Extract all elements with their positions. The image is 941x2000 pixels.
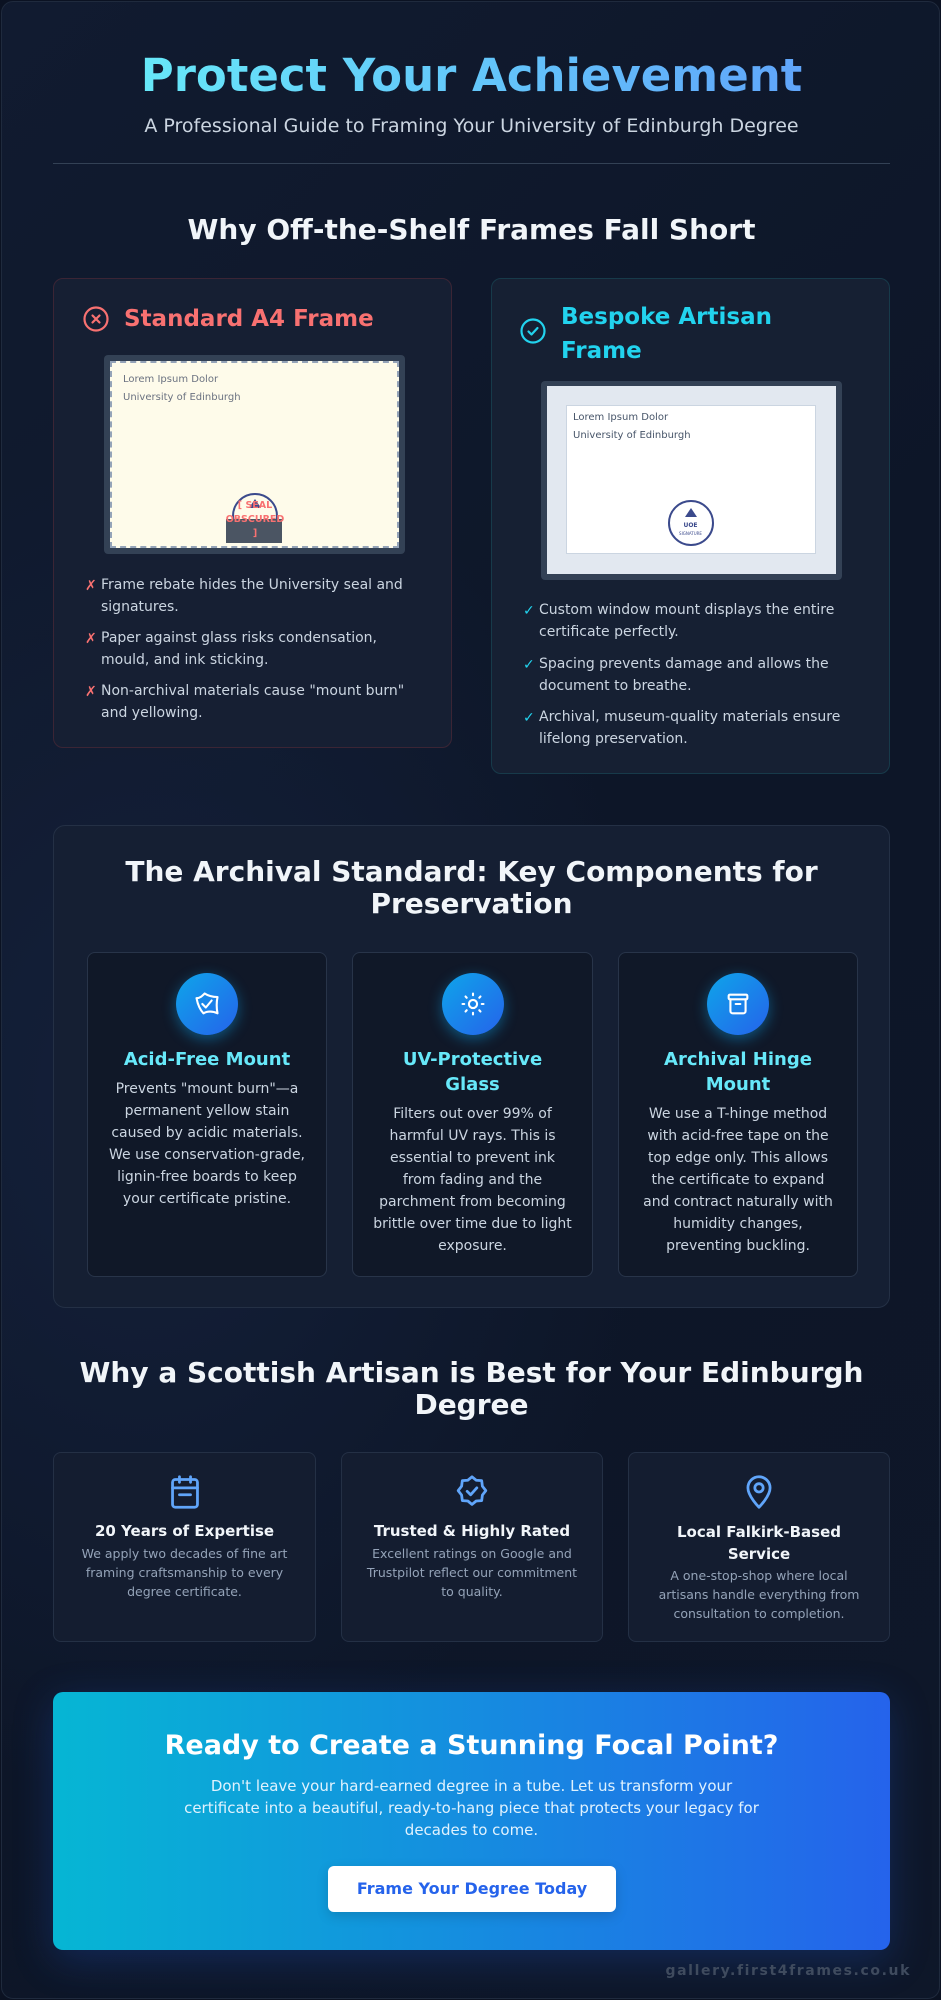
card: trusted: Trusted & Highly Rated (374, 1522, 570, 1540)
illustration: A4 frame: ] (253, 528, 257, 539)
card: trusted: Trustpilot reflect our commitment (367, 1565, 577, 1580)
title: Protect Your Achievement (141, 49, 802, 102)
panel: archival standard (53, 825, 890, 1308)
CTA button (328, 1866, 616, 1912)
CTA title: Ready to Create a Stunning Focal Point? (165, 1730, 778, 1761)
card: UV glass: brittle over time due to light (373, 1216, 572, 1232)
subtitle: A Professional Guide to Framing Your University of Edinburgh Degree (144, 115, 799, 137)
card title (561, 304, 772, 364)
seal visible (668, 500, 714, 546)
heading (125, 855, 818, 920)
card: UV glass: parchment from becoming (379, 1194, 566, 1210)
heading: scottish artisan: Degree (414, 1388, 529, 1421)
illustration: A4 frame: Lorem Ipsum Dolor (123, 374, 218, 385)
card: archival hinge (618, 952, 858, 1277)
card: archival hinge: Mount (706, 1074, 770, 1095)
bullet list: problems: Paper against glass risks condensation, (101, 630, 377, 646)
panel: bespoke artisan frame (491, 278, 890, 774)
bullet list: benefits: ✓ (523, 657, 535, 673)
bullet list: benefits: certificate perfectly. (539, 624, 679, 640)
icon: badge check (456, 1475, 488, 1506)
illustration: bespoke frame: University of Edinburgh (573, 430, 691, 441)
bullet list: problems (85, 577, 404, 721)
card: acid-free mount: caused by acidic materials. (111, 1125, 303, 1141)
icon: calendar (171, 1475, 199, 1509)
card: UV glass: UV-Protective (403, 1049, 542, 1070)
card: UV glass: essential to prevent ink (390, 1150, 555, 1166)
bullet list: benefits: Archival, museum-quality materials ensure (539, 709, 840, 725)
card: trusted: Excellent ratings on Google and (372, 1546, 572, 1561)
card: 20 years: 20 Years of Expertise (95, 1522, 274, 1540)
bullet list: problems: mould, and ink sticking. (101, 652, 268, 668)
card title: Standard A4 Frame (124, 306, 374, 332)
illustration: A4 frame (104, 355, 405, 554)
icon: archive box (707, 973, 769, 1035)
card: UV glass: harmful UV rays. This is (389, 1128, 556, 1144)
illustration: A4 frame: University of Edinburgh (123, 392, 241, 403)
card: acid-free mount: lignin-free boards to keep (117, 1169, 297, 1185)
bullet list: problems: ✗ (85, 684, 97, 700)
illustration: bespoke frame (541, 381, 842, 580)
card: local falkirk (628, 1452, 890, 1642)
bullet list: problems: ✗ (85, 578, 97, 594)
CTA text (184, 1777, 759, 1839)
card: UV glass: Filters out over 99% of (393, 1106, 552, 1122)
bullet list: benefits: ✓ (523, 603, 535, 619)
bullet list: benefits: ✓ (523, 710, 535, 726)
seal visible: SIGNATURE (679, 531, 702, 536)
icon: x circle (83, 306, 109, 332)
card: archival hinge: humidity changes, (673, 1216, 803, 1232)
card: archival hinge: Archival Hinge (664, 1049, 812, 1070)
card: acid-free mount: We use conservation-grade, (109, 1147, 305, 1163)
bullet list: benefits: Spacing prevents damage and allows the (539, 656, 829, 672)
bullet list: benefits: Custom window mount displays the entire (539, 602, 834, 618)
card: 20 years: framing craftsmanship to every (86, 1565, 283, 1580)
bullet list: problems: Non-archival materials cause "mount burn" (101, 683, 404, 699)
illustration: A4 frame: [ SEAL (238, 500, 272, 511)
bullet list: problems: signatures. (101, 599, 179, 615)
card: trusted (341, 1452, 603, 1642)
card title: Bespoke Artisan (561, 304, 772, 330)
bullet list: benefits: document to breathe. (539, 678, 692, 694)
card: acid-free mount: permanent yellow stain (125, 1103, 289, 1119)
card: acid-free mount: your certificate pristine. (123, 1191, 291, 1207)
CTA text: decades to come. (405, 1821, 538, 1839)
seal obscured (232, 493, 278, 539)
CTA button: Frame Your Degree Today (357, 1879, 587, 1898)
bullet list: benefits: lifelong preservation. (539, 731, 688, 747)
panel: standard A4 frame (53, 278, 452, 748)
card: UV glass: exposure. (438, 1238, 507, 1254)
card: 20 years: We apply two decades of fine art (82, 1546, 287, 1561)
illustration: bespoke frame: Lorem Ipsum Dolor (573, 412, 668, 423)
heading: Preservation (370, 887, 573, 920)
card: acid-free mount: Prevents "mount burn"—a (116, 1081, 298, 1097)
card: archival hinge: preventing buckling. (666, 1238, 810, 1254)
bullet list: problems: and yellowing. (101, 705, 203, 721)
card: archival hinge: with acid-free tape on the (647, 1128, 829, 1144)
card: local falkirk: A one-stop-shop where local (670, 1568, 848, 1583)
heading: scottish artisan (80, 1356, 863, 1421)
card title: Frame (561, 338, 642, 364)
heading: scottish artisan: Why a Scottish Artisan is Best for Your Edinburgh (80, 1356, 863, 1389)
card: acid-free mount (87, 952, 327, 1277)
bullet list: benefits (523, 602, 840, 747)
bullet list: problems: Frame rebate hides the University seal and (101, 577, 403, 593)
CTA text: certificate into a beautiful, ready-to-hang piece that protects your legacy for (184, 1799, 759, 1817)
seal visible: UOE (683, 522, 698, 529)
card: UV glass: from fading and the (403, 1172, 542, 1188)
card: archival hinge: and contract naturally with (643, 1194, 833, 1210)
card: 20 years (53, 1452, 316, 1642)
footer url: gallery.first4frames.co.uk (666, 1963, 911, 1979)
icon: check circle (520, 318, 546, 344)
card: archival hinge: We use a T-hinge method (649, 1106, 827, 1122)
heading: The Archival Standard: Key Components for (125, 855, 818, 888)
card: archival hinge: top edge only. This allows (648, 1150, 828, 1166)
card: acid-free mount: Acid-Free Mount (124, 1049, 290, 1070)
icon: sun (442, 973, 504, 1035)
icon: map pin (746, 1475, 772, 1509)
card: local falkirk: Service (728, 1545, 790, 1563)
illustration: A4 frame: OBSCURED (226, 514, 284, 525)
bullet list: problems: ✗ (85, 631, 97, 647)
card: 20 years: degree certificate. (127, 1584, 242, 1599)
card: UV glass: Glass (445, 1074, 500, 1095)
icon: shield (176, 973, 238, 1035)
card: UV glass (352, 952, 593, 1277)
CTA banner (53, 1692, 890, 1950)
card: local falkirk: consultation to completion. (673, 1606, 845, 1621)
heading: off-the-shelf: Why Off-the-Shelf Frames Fall Short (188, 213, 755, 246)
card: trusted: to quality. (441, 1584, 503, 1599)
CTA text: Don't leave your hard-earned degree in a tube. Let us transform your (211, 1777, 732, 1795)
card: local falkirk: Local Falkirk-Based (677, 1523, 841, 1541)
card: archival hinge: the certificate to expand (652, 1172, 824, 1188)
card: local falkirk: artisans handle everything from (659, 1587, 859, 1602)
